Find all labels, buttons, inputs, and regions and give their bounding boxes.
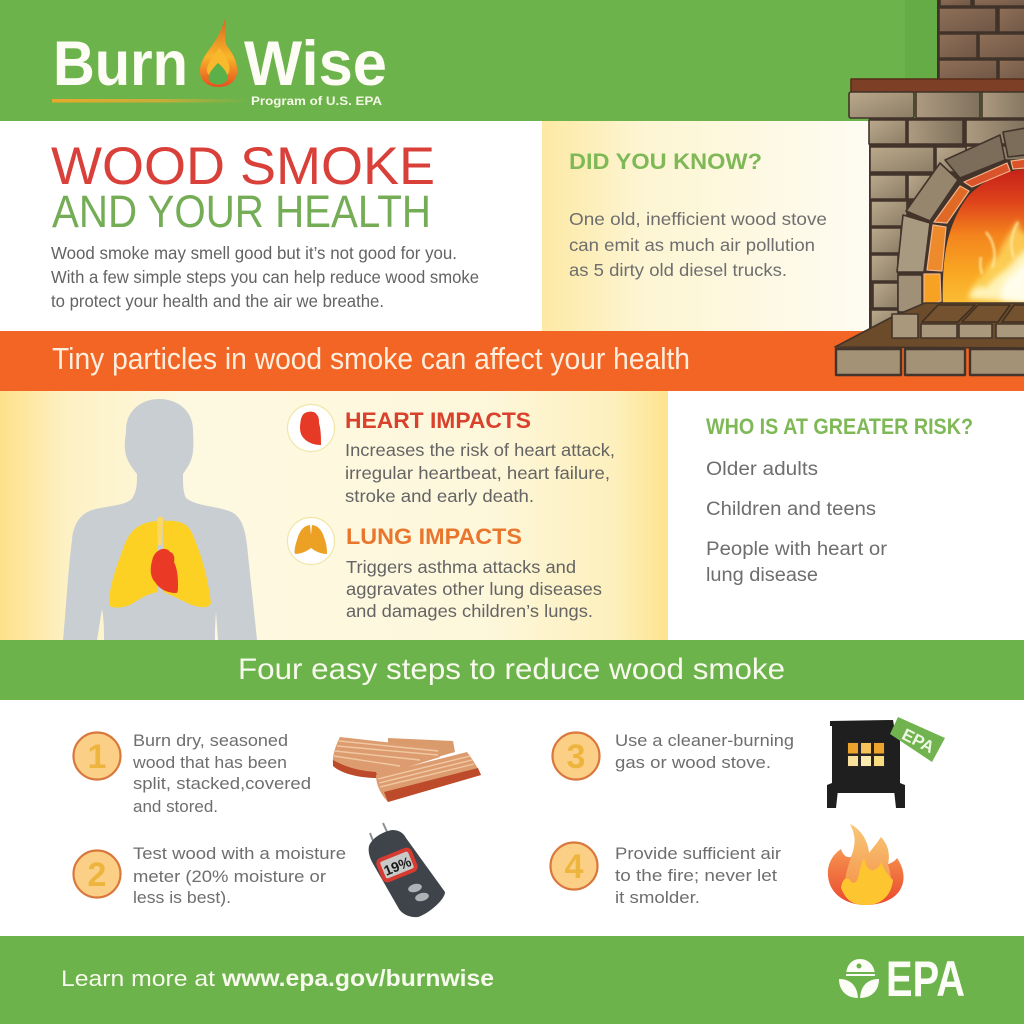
hearth top (835, 303, 1024, 348)
step 4 text: it smolder. (615, 888, 700, 907)
step 1 text: wood that has been (132, 753, 287, 772)
panel: health impacts (0, 391, 668, 640)
text block: risk groups: People with heart or (706, 539, 888, 560)
text block: stove fact (569, 209, 827, 280)
text block: lung impacts: and damages children’s lungs. (346, 601, 593, 621)
text block: risk groups: Children and teens (706, 499, 876, 520)
mantle stones (849, 92, 1024, 118)
step 4 badge (550, 842, 598, 890)
text block: intro: With a few simple steps you can help reduce wood smoke (51, 267, 479, 287)
logo tagline: Program of U.S. EPA (251, 96, 382, 108)
hearth tiles (922, 305, 1024, 322)
text block: lung impacts (346, 557, 602, 621)
step 2 text: Test wood with a moisture (133, 844, 346, 863)
icon: wood stove (827, 717, 945, 808)
step 4 badge: 4 (565, 848, 584, 886)
step 2 text (133, 844, 346, 907)
EPA flower mark (839, 959, 879, 998)
heading: risk: WHO IS AT GREATER RISK? (706, 414, 973, 439)
panel: did you know (542, 121, 869, 331)
hearth upper bricks (892, 314, 1024, 338)
step 3 badge: 3 (567, 738, 585, 776)
fire opening (942, 168, 1024, 304)
heading: four easy steps: Four easy steps to reduce wood smoke (238, 653, 785, 686)
illustration: fireplace (835, 0, 1024, 375)
logo word: Wise: Wise (244, 29, 387, 99)
heading: tiny particles: Tiny particles in wood smoke can affect your health (52, 341, 690, 376)
step 1 text: Burn dry, seasoned (133, 731, 288, 750)
panel: intro background (0, 121, 542, 331)
text block: heart impacts (345, 440, 615, 506)
text block: lung impacts: aggravates other lung diseases (346, 579, 602, 599)
logo underline (52, 99, 246, 102)
icon: moisture meter: 19% (381, 853, 414, 879)
icon: logo flame (200, 19, 237, 87)
panel: orange band (0, 331, 1024, 391)
icon: moisture meter (369, 823, 445, 917)
EPA wordmark: EPA (886, 951, 965, 1007)
step 1 text (132, 731, 311, 816)
text block: intro: Wood smoke may smell good but it’s not good for you. (51, 243, 457, 263)
logo: Burn Wise (52, 19, 387, 108)
text block: risk groups: Older adults (706, 459, 818, 480)
text block: risk groups (706, 459, 888, 586)
illustration: human silhouette (63, 399, 257, 640)
step 4 text (615, 844, 781, 907)
icon: flame (828, 824, 904, 905)
step 1 badge: 1 (88, 738, 106, 776)
step 3 text: gas or wood stove. (615, 753, 771, 772)
stone wall backing (869, 118, 1024, 332)
step 2 badge: 2 (88, 856, 106, 894)
panel: footer (0, 936, 1024, 1024)
arch brick lining (924, 159, 1024, 307)
text block: intro: to protect your health and the air we breathe. (51, 291, 384, 311)
panel: steps band (0, 640, 1024, 700)
logo word: Burn: Burn (53, 29, 188, 99)
step 2 text: less is best). (133, 888, 231, 907)
heart (151, 549, 178, 593)
link: epa url: www.epa.gov/burnwise (221, 965, 494, 991)
step 4 text: Provide sufficient air (615, 844, 781, 863)
step 3 text (615, 731, 794, 772)
step 1 badge (74, 732, 120, 780)
text block: stove fact: can emit as much air pollution (569, 235, 815, 255)
text block: heart impacts: irregular heartbeat, heart failure, (345, 463, 610, 483)
chimney shadow (905, 0, 937, 79)
flames (968, 220, 1024, 302)
step 3 badge (552, 732, 600, 780)
step 2 text: meter (20% moisture or (133, 867, 326, 886)
text block: stove fact: One old, inefficient wood stove (569, 209, 827, 229)
EPA tag: EPA (899, 725, 937, 757)
mantle (851, 79, 1024, 92)
arch stones (897, 128, 1024, 312)
panel: steps (0, 700, 1024, 936)
icon: lungs badge (288, 518, 334, 564)
icon: heart badge (288, 404, 334, 452)
chimney bricks (937, 0, 1024, 80)
text block: intro (51, 243, 479, 311)
subtitle: and your health: AND YOUR HEALTH (52, 186, 431, 237)
icon: firewood (333, 737, 481, 802)
hearth front bricks (836, 349, 1024, 375)
text block: heart impacts: stroke and early death. (345, 486, 534, 506)
panel: header band (0, 0, 1024, 121)
heading: heart impacts: HEART IMPACTS (345, 408, 531, 433)
title: wood smoke: WOOD SMOKE (51, 137, 435, 196)
step 3 text: Use a cleaner-burning (615, 731, 794, 750)
body silhouette (63, 399, 257, 640)
step 4 text: to the fire; never let (615, 866, 777, 885)
column stones (869, 120, 1024, 331)
text block: heart impacts: Increases the risk of heart attack, (345, 440, 615, 460)
lungs (109, 517, 211, 608)
text block: lung impacts: Triggers asthma attacks and (346, 557, 576, 577)
panel: who is at greater risk (668, 391, 1024, 640)
text block: stove fact: as 5 dirty old diesel trucks. (569, 260, 787, 280)
text block: risk groups: lung disease (706, 565, 818, 586)
heading: did you know: DID YOU KNOW? (569, 149, 762, 174)
step 1 text: and stored. (133, 797, 218, 816)
text: learn more: Learn more at (61, 966, 215, 991)
step 2 badge (74, 850, 120, 898)
logo: EPA (839, 951, 965, 1007)
step 1 text: split, stacked,covered (133, 774, 311, 793)
heading: lung impacts: LUNG IMPACTS (346, 524, 522, 549)
